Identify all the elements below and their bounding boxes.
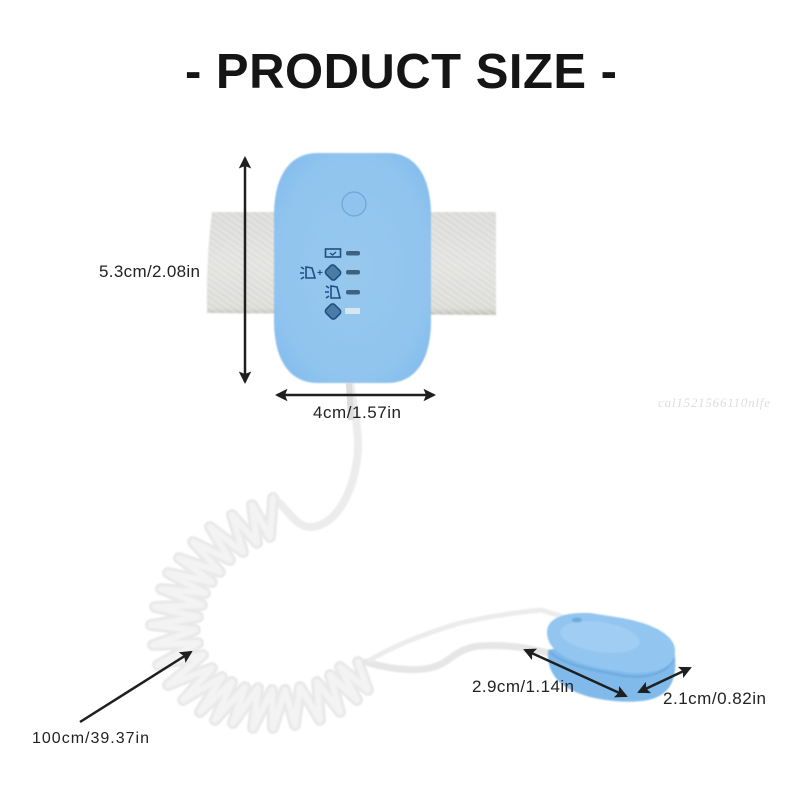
arrow: width <box>277 394 434 396</box>
title: - PRODUCT SIZE - <box>185 45 617 99</box>
arrow: height <box>244 158 246 382</box>
main alarm unit <box>274 153 431 383</box>
indicator: sound <box>325 286 360 298</box>
sensor clip <box>547 613 675 702</box>
indicator: sound plus vibration: + <box>317 268 323 279</box>
label: width: 4cm/1.57in <box>313 403 401 422</box>
groove shadow <box>550 652 674 677</box>
cable strain relief <box>349 383 351 420</box>
upper pad <box>547 613 675 673</box>
arrow: sensor width <box>639 668 690 692</box>
cable from main unit to coil <box>273 383 358 527</box>
label: sensor width: 2.1cm/0.82in <box>663 689 766 708</box>
watermark: cal1521566110nlfe <box>658 395 770 410</box>
power button <box>342 192 366 216</box>
label: sensor length: 2.9cm/1.14in <box>472 677 574 696</box>
indicator: vibration <box>324 303 360 320</box>
indicator: battery <box>326 249 360 257</box>
label: height: 5.3cm/2.08in <box>99 262 200 281</box>
arrow: cable length <box>80 652 191 722</box>
fabric strap <box>207 212 496 315</box>
clip hole <box>572 618 582 622</box>
sensor wires <box>366 610 567 670</box>
indicator: sound plus vibration <box>300 264 360 281</box>
arrow: sensor length <box>525 650 626 696</box>
coiled cable <box>151 498 368 728</box>
unit body <box>274 153 431 383</box>
lower pad <box>548 640 675 702</box>
label: cable length: 100cm/39.37in <box>32 730 149 747</box>
